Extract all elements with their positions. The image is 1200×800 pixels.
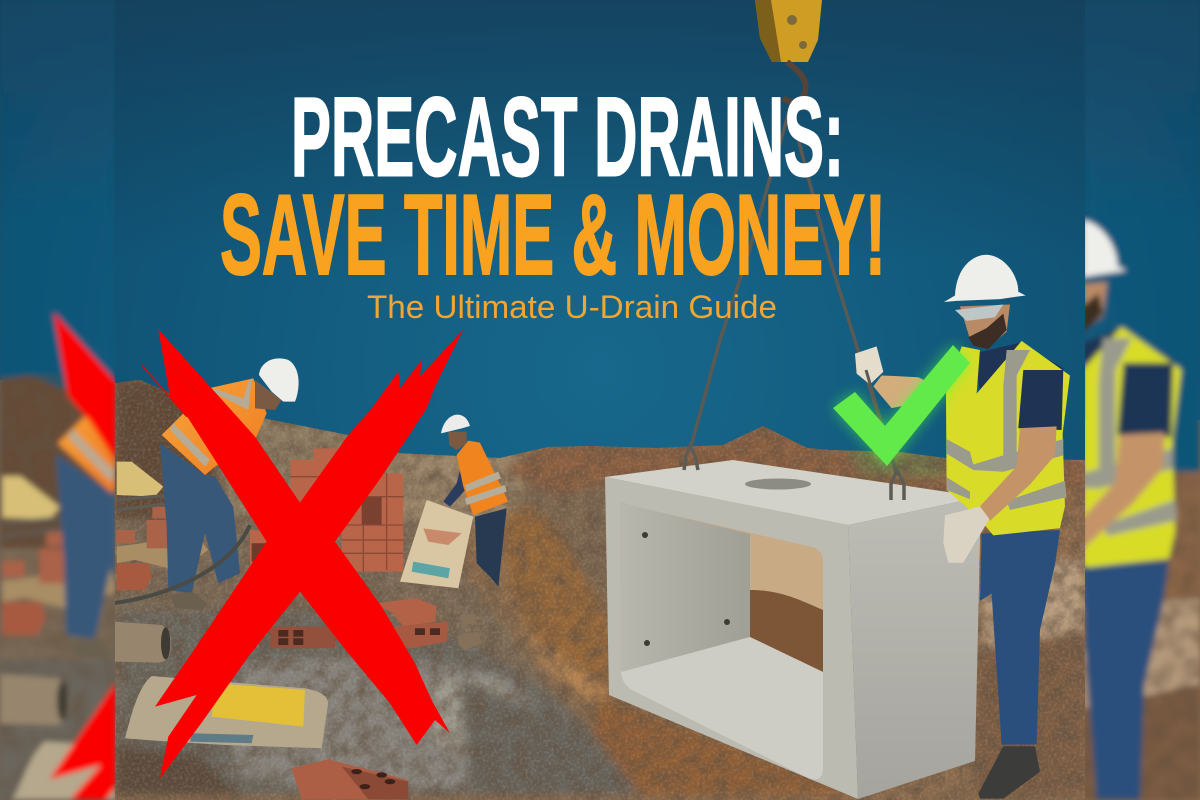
raised glove <box>855 346 883 385</box>
navy sleeve over vest <box>1018 370 1063 430</box>
foreground brick <box>292 759 408 799</box>
work boot <box>978 746 1040 799</box>
foreground pipe <box>115 622 171 663</box>
rope near hand passes in front <box>866 370 897 475</box>
green check mark <box>833 345 970 466</box>
right worker jeans and boot, behind block <box>978 530 1060 799</box>
beard <box>968 314 1007 349</box>
brick holes <box>278 628 440 645</box>
right strip base colour <box>1085 0 1200 420</box>
sky background <box>115 0 1085 480</box>
cement bag <box>400 500 473 588</box>
worker jeans <box>160 443 240 593</box>
left strip enlarged blurred scene <box>0 0 115 800</box>
left strip base colour <box>0 0 115 420</box>
inner back wall <box>620 502 750 672</box>
lifting ropes <box>690 108 897 475</box>
check glow <box>833 345 970 466</box>
navy sleeve <box>443 471 465 506</box>
sack on left <box>116 542 208 568</box>
brick pile <box>117 563 152 590</box>
white hard hat <box>259 358 299 402</box>
check shape <box>833 345 970 466</box>
lower glove <box>943 506 989 563</box>
head and neck <box>960 305 1010 348</box>
raised arm <box>873 375 937 408</box>
rocks <box>458 614 482 650</box>
bolt holes <box>642 532 730 646</box>
face <box>448 432 467 450</box>
loose bricks and bags left <box>117 462 208 590</box>
right blurred backdrop strip <box>1082 0 1200 800</box>
brick wall stack <box>250 448 403 572</box>
white hard hat <box>441 415 470 433</box>
red X over traditional method <box>142 329 463 778</box>
ground and earth <box>115 380 1085 800</box>
safety glasses <box>955 305 1003 321</box>
orange hi-vis vest <box>162 378 267 475</box>
jeans <box>980 530 1060 744</box>
left strip ground base <box>0 380 115 800</box>
right worker upper body <box>855 255 1070 563</box>
pipes <box>117 495 172 510</box>
dirt seen through opening <box>750 590 823 672</box>
hose on ground <box>115 525 250 603</box>
second worker with cement bag <box>400 415 508 588</box>
left worker laying bricks <box>160 358 299 610</box>
right strip enlarged blurred scene <box>1082 0 1200 800</box>
yellow-white bag behind <box>117 462 163 497</box>
right strip ground base <box>1085 420 1200 800</box>
opening view through dirt <box>620 503 823 672</box>
precast concrete U-drain block <box>605 446 981 799</box>
navy t-shirt <box>973 343 1063 448</box>
front face <box>605 477 858 799</box>
worker boot <box>170 592 207 610</box>
yellow hi-vis vest <box>946 341 1070 535</box>
vest reflective band <box>170 378 252 467</box>
lifting hole <box>745 478 811 490</box>
bag label <box>412 562 450 578</box>
forearm <box>980 426 1057 521</box>
ground bricks centre <box>270 598 482 650</box>
lifting lug left <box>684 446 698 470</box>
crane hook block <box>755 0 822 102</box>
lifting lug right <box>891 470 904 500</box>
foreground cement bag <box>125 676 328 748</box>
worker head <box>255 380 282 410</box>
vest reflective strips <box>947 350 1067 510</box>
inner floor <box>621 637 823 780</box>
orange vest <box>457 441 508 515</box>
subtitle: The Ultimate U-Drain Guide <box>367 289 777 325</box>
navy trousers <box>475 508 507 587</box>
side face <box>848 497 981 799</box>
left blurred backdrop strip <box>0 0 115 800</box>
top face <box>605 460 981 525</box>
reflective band <box>465 472 507 505</box>
white hard hat <box>944 255 1026 302</box>
